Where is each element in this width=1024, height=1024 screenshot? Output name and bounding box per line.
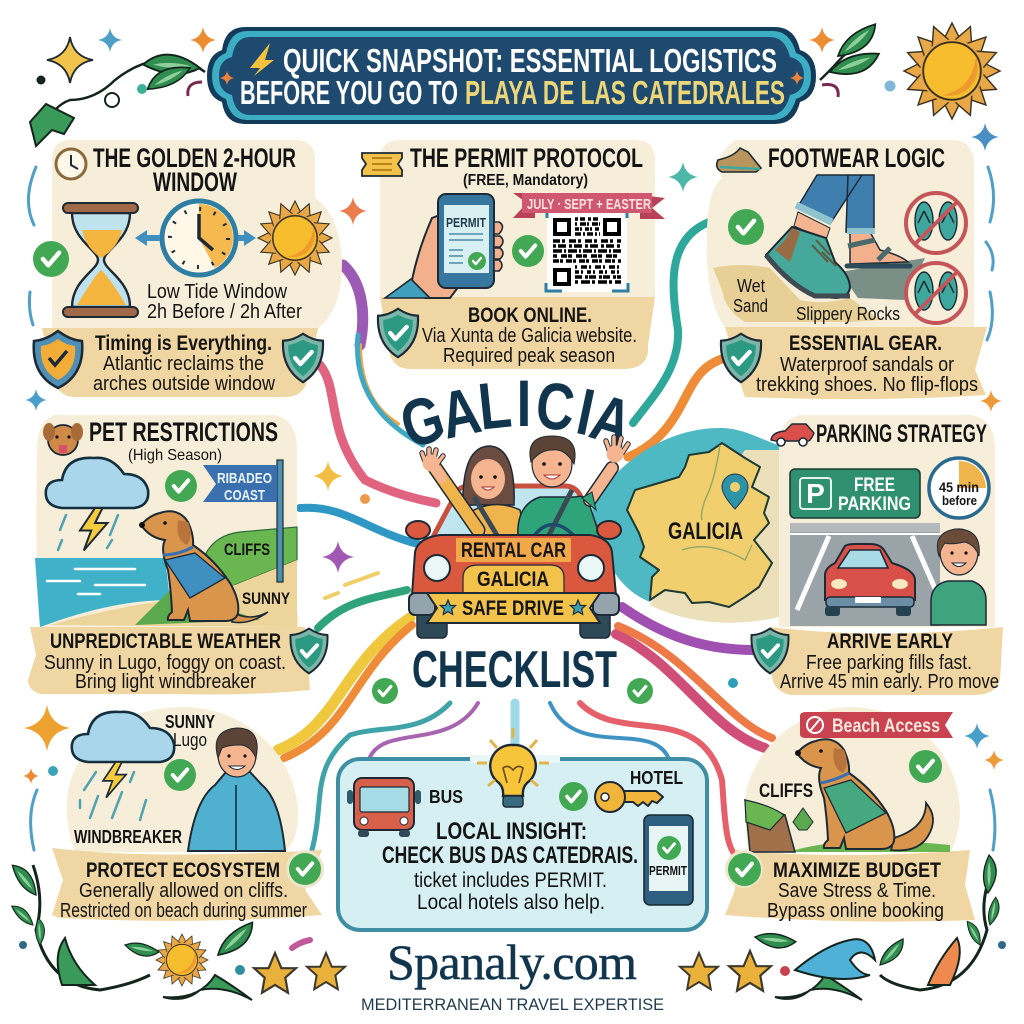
ribbon <box>42 328 318 397</box>
label: sand: Sand <box>733 296 768 316</box>
icon: dog head <box>43 423 83 455</box>
text: low tide window: Low Tide Window <box>147 281 287 303</box>
text: check bus: CHECK BUS DAS CATEDRAIS. <box>382 842 638 869</box>
no flip-flops 1 <box>906 193 966 253</box>
icon: bottom sun <box>145 923 219 997</box>
plate: galicia: GALICIA <box>477 568 549 591</box>
text: timing: Timing is Everything. <box>95 332 272 355</box>
text: windbreaker: Bring light windbreaker <box>75 671 256 693</box>
ribbon <box>725 850 975 922</box>
check <box>512 235 544 267</box>
icon: car <box>771 424 814 446</box>
shield left <box>34 331 82 388</box>
check left of center <box>372 678 398 704</box>
shield <box>721 334 761 382</box>
plate: safe drive: SAFE DRIVE <box>462 597 564 620</box>
sign: free parking: FREE <box>854 475 895 496</box>
icon: ticket <box>362 153 402 176</box>
text: trekking: trekking shoes. No flip-flops <box>756 374 978 396</box>
center: checklist heading: CHECKLIST <box>412 641 617 699</box>
icon: jeans <box>797 175 874 232</box>
heading: FOOTWEAR LOGIC <box>768 143 945 173</box>
footer: brand: Spanaly.com <box>387 934 637 990</box>
shield <box>751 629 789 673</box>
icon: phone in hand <box>385 194 503 298</box>
icon: clock <box>56 149 86 179</box>
sand <box>50 560 297 627</box>
text: required: Required peak season <box>443 345 615 367</box>
icon: shoe <box>717 148 761 172</box>
subheading: (FREE, Mandatory) <box>463 172 588 189</box>
text: save stress: Save Stress & Time. <box>778 880 936 902</box>
text: arrive early: ARRIVE EARLY <box>827 630 953 653</box>
label: bus: BUS <box>429 787 463 807</box>
icon: phone: PERMIT <box>649 863 687 878</box>
banner: months: JULY · SEPT + EASTER <box>527 196 651 213</box>
label: hotel: HOTEL <box>630 768 683 788</box>
text: atlantic: Atlantic reclaims the <box>103 353 264 375</box>
flag: COAST <box>224 487 265 504</box>
heading: THE PERMIT PROTOCOL <box>410 143 643 173</box>
center: Galicia heading <box>392 366 641 463</box>
icon: hiking boot <box>766 205 850 298</box>
label: windbreaker: WINDBREAKER <box>74 827 182 847</box>
center: rental car with couple <box>406 436 628 638</box>
cliffs <box>205 527 297 600</box>
mirrors <box>406 521 430 539</box>
bottom right ornament <box>754 855 1006 1000</box>
icon: sun <box>243 186 347 290</box>
label: sunny: SUNNY <box>165 712 215 732</box>
panel: maximize budget <box>725 707 975 922</box>
shield right <box>283 334 323 382</box>
sign: free parking: PARKING <box>838 494 911 515</box>
icon: clock face <box>162 201 236 275</box>
icon: dog <box>139 511 268 623</box>
QR code <box>546 210 628 292</box>
flag: RIBADEO <box>217 470 272 487</box>
corner vine top right <box>820 24 882 97</box>
ribbon <box>28 627 310 694</box>
timer: 45 min <box>939 479 979 495</box>
text: ticket: ticket includes PERMIT. <box>414 869 607 892</box>
person in windbreaker <box>188 728 285 851</box>
icon: wave <box>795 939 875 979</box>
panel: pet restrictions <box>28 415 328 694</box>
icon: hourglass <box>63 203 138 317</box>
panel: protect ecosystem <box>52 707 324 922</box>
stars bottom right <box>680 951 771 991</box>
footer: tagline: MEDITERRANEAN TRAVEL EXPERTISE <box>361 995 664 1014</box>
panel: local insight <box>338 728 707 930</box>
check <box>909 750 942 783</box>
center: Galicia heading: A <box>434 373 487 453</box>
check with ring <box>725 850 763 888</box>
text: bypass: Bypass online booking <box>767 900 944 922</box>
panel: permit protocol <box>362 140 665 369</box>
ribbon <box>52 848 322 921</box>
label: lugo: Lugo <box>173 730 207 750</box>
plate: rental car: RENTAL CAR <box>461 539 566 562</box>
text: waterproof: Waterproof sandals or <box>780 354 954 376</box>
waves <box>47 569 145 594</box>
sign: free parking: P <box>806 478 825 509</box>
person <box>931 529 986 625</box>
subheading: (High Season) <box>128 447 222 464</box>
woman <box>422 446 525 537</box>
panel: parking strategy <box>751 415 1003 695</box>
connecting ribbons <box>278 222 772 860</box>
check <box>165 470 197 502</box>
corner vine top left <box>30 45 205 146</box>
banner: beach access <box>800 712 953 738</box>
map: Galicia <box>592 428 795 623</box>
label: cliffs: CLIFFS <box>759 781 813 802</box>
text: xunta: Via Xunta de Galicia website. <box>422 325 637 347</box>
icon: dog <box>795 739 933 850</box>
arrows <box>135 230 256 246</box>
icon: key <box>595 782 663 812</box>
check with ring <box>286 850 324 888</box>
ground <box>713 258 925 322</box>
plate: safe drive <box>427 593 600 623</box>
icon: star right <box>790 71 804 85</box>
text: sunny in lugo: Sunny in Lugo, foggy on coast. <box>44 652 286 674</box>
map label: GALICIA <box>668 518 743 545</box>
check <box>33 241 69 277</box>
label: slippery rocks: Slippery Rocks <box>796 304 900 324</box>
center: Galicia heading: A <box>583 379 641 461</box>
panel: golden 2-hour window <box>33 140 347 397</box>
check <box>164 759 196 791</box>
icon: phone in hand: PERMIT <box>446 215 486 230</box>
grass <box>135 590 260 625</box>
body <box>412 535 616 595</box>
icon: storm cloud <box>72 712 174 820</box>
icon: bus <box>347 778 421 837</box>
title highlight: PLAYA DE LAS CATEDRALES <box>465 74 785 111</box>
icon: sandal <box>847 231 910 266</box>
icon: bulb <box>477 728 549 807</box>
icon: phone <box>644 815 693 905</box>
parking lot <box>790 523 940 626</box>
flag <box>203 460 283 582</box>
text: protect ecosystem: PROTECT ECOSYSTEM <box>86 859 280 882</box>
pin <box>722 474 748 509</box>
check <box>728 209 764 245</box>
text: allowed: Generally allowed on cliffs. <box>79 880 288 902</box>
bottom left ornament <box>11 860 310 1000</box>
icon: lightning <box>250 43 274 76</box>
center: Galicia heading: I <box>517 366 531 440</box>
bumper <box>409 593 435 615</box>
banner: months <box>513 193 665 219</box>
label: cliffs: CLIFFS <box>224 540 270 559</box>
ribbon <box>380 297 655 369</box>
center: Galicia heading: G <box>392 380 453 463</box>
center: Galicia heading: I <box>571 374 601 450</box>
sparkles <box>23 27 1004 850</box>
label: wet: Wet <box>737 276 765 296</box>
text: restricted: Restricted on beach during summer <box>60 900 307 922</box>
ribbon <box>770 627 1003 695</box>
icon: red car <box>825 544 915 616</box>
text: arches: arches outside window <box>93 373 275 395</box>
text: before and after: 2h Before / 2h After <box>147 301 302 323</box>
center: Galicia heading: C <box>533 368 578 445</box>
text: hotels: Local hotels also help. <box>417 891 605 914</box>
heading: THE GOLDEN 2-HOUR <box>93 143 296 173</box>
shield <box>290 629 328 673</box>
center: Galicia heading: L <box>475 367 515 444</box>
icon: storm cloud <box>46 458 148 550</box>
man <box>518 436 628 537</box>
text: book online: BOOK ONLINE. <box>468 304 592 327</box>
title line 2: BEFORE YOU GO TO <box>240 74 458 111</box>
heading: PET RESTRICTIONS <box>89 417 278 447</box>
sun top right <box>884 3 1020 139</box>
sea <box>35 558 170 627</box>
check <box>559 782 588 811</box>
tyres <box>417 612 447 638</box>
ribbon <box>725 327 987 399</box>
text: weather: UNPREDICTABLE WEATHER <box>50 630 281 653</box>
heading line 2: WINDOW <box>153 167 237 197</box>
timer: before <box>942 493 977 508</box>
check right of center <box>627 678 653 704</box>
sign: free parking <box>790 469 920 518</box>
headlights <box>424 555 450 581</box>
text: essential gear: ESSENTIAL GEAR. <box>789 332 942 355</box>
shield <box>378 309 418 357</box>
timer <box>929 458 989 518</box>
stars bottom left <box>254 953 345 993</box>
icon: star left <box>220 71 234 85</box>
no flip-flops 2 <box>906 263 966 323</box>
text: maximize budget: MAXIMIZE BUDGET <box>773 859 941 882</box>
label: sunny: SUNNY <box>242 589 291 608</box>
window <box>433 486 601 537</box>
title line 1: QUICK SNAPSHOT: ESSENTIAL LOGISTICS <box>283 42 777 79</box>
panel: footwear logic <box>707 140 987 399</box>
icon: cliff and grass <box>745 800 950 852</box>
banner: beach access: Beach Access <box>832 716 940 737</box>
title banner <box>207 27 816 124</box>
text: local insight: LOCAL INSIGHT: <box>436 818 587 845</box>
text: fills fast: Free parking fills fast. <box>806 652 972 674</box>
